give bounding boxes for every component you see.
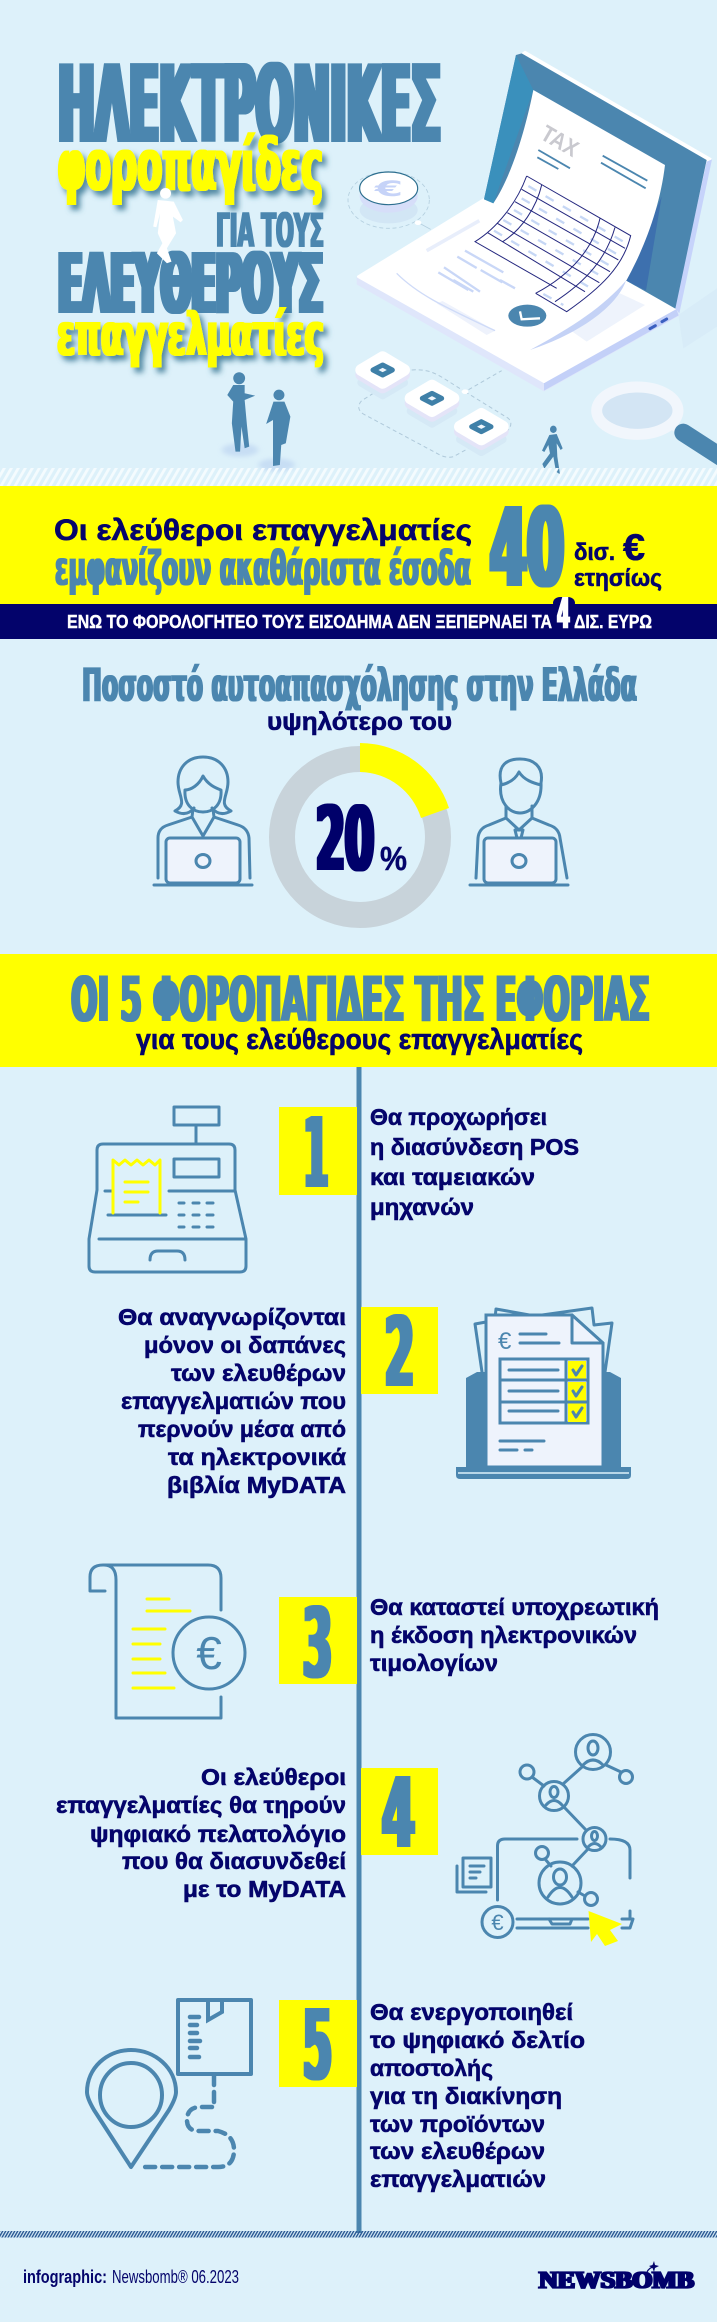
number box 3 [279, 1597, 357, 1684]
text 5: για τη διακίνηση [370, 2083, 562, 2109]
item 2: 2 [385, 1296, 414, 1409]
item 3: 3 [303, 1587, 332, 1700]
timeline vertical line [356, 1067, 362, 2233]
panel: yellow income band: 40 [490, 484, 564, 612]
footer credit: infographic: [23, 2267, 107, 2287]
unit: yearly: ετησίως [574, 565, 662, 592]
text 4: Οι ελεύθεροι [201, 1764, 346, 1790]
icon: customer network on laptop [457, 1734, 633, 1946]
icon: documents on laptop with checklist [456, 1308, 631, 1479]
icon: invoice with euro coin: € [196, 1627, 222, 1679]
panel: navy taxable income band: 4 [557, 589, 570, 639]
text 2 [118, 1304, 346, 1498]
subheading: υψηλότερο του [267, 708, 452, 736]
euro sign: € [623, 527, 645, 568]
text 4: επαγγελματίες θα τηρούν [56, 1792, 346, 1818]
text 2: επαγγελματιών που [121, 1388, 346, 1414]
icon: woman at laptop [154, 757, 252, 885]
icon: location pin with dashed route to parcel [87, 2000, 251, 2167]
number box 1 [279, 1107, 357, 1195]
text 1 [370, 1104, 579, 1220]
item 1 [279, 1097, 579, 1220]
text 5: Θα ενεργοποιηθεί [370, 1999, 573, 2025]
footer logo: Newsbomb: NEWSBOMB [539, 2268, 694, 2294]
text 1: μηχανών [370, 1194, 474, 1220]
hero figures: blue silhouettes [222, 372, 295, 472]
text 5: το ψηφιακό δελτίο [370, 2027, 585, 2053]
text 1: και ταμειακών [370, 1164, 535, 1190]
icon: documents on laptop with checklist: € [498, 1328, 512, 1355]
text 2: Θα αναγνωρίζονται [118, 1304, 346, 1330]
icon: customer network on laptop: € [491, 1910, 504, 1935]
percent sign: % [380, 840, 407, 877]
text 4 [56, 1764, 346, 1902]
text 1: η διασύνδεση POS [370, 1134, 579, 1160]
decorative hatch [0, 468, 717, 486]
decorative hatch [0, 2231, 717, 2238]
unit: billion euro: δισ. [574, 539, 615, 566]
text 5 [370, 1999, 585, 2192]
hero illustration: laptop with tax document [348, 51, 717, 391]
item 4 [56, 1757, 438, 1902]
icon: invoice with euro coin [90, 1565, 245, 1718]
hero icons: three rounded buttons [359, 357, 511, 457]
hero figure: white silhouette over the title [153, 188, 183, 263]
item 5: 5 [303, 1989, 332, 2102]
text 5: των προϊόντων [370, 2111, 545, 2137]
hero figure: walking person [542, 426, 563, 474]
item 1: 1 [304, 1097, 328, 1210]
text 3: Θα καταστεί υποχρεωτική [370, 1594, 659, 1620]
panel: yellow traps heading band [0, 954, 717, 1067]
item 5 [279, 1989, 585, 2192]
text 4: ψηφιακό πελατολόγιο [90, 1821, 346, 1847]
text 1: Θα προχωρήσει [370, 1104, 547, 1130]
income text line 1: Οι ελεύθεροι επαγγελματίες [54, 514, 472, 547]
taxable income text: ΕΝΩ ΤΟ ΦΟΡΟΛΟΓΗΤΕΟ ΤΟΥΣ ΕΙΣΟΔΗΜΑ ΔΕΝ ΞΕΠΕΡΝΑΕΙ ΤΑ [67, 612, 552, 632]
item 2 [118, 1296, 438, 1498]
text 4: με το MyDATA [183, 1876, 346, 1902]
text 2: τα ηλεκτρονικά [168, 1444, 346, 1470]
hero icon: coin symbol: € [374, 176, 403, 201]
hero text: TAX: TAX [536, 120, 584, 162]
number box 5 [279, 2000, 357, 2087]
title: line 5 yellow: επαγγελματίες [57, 300, 324, 370]
text 5: επαγγελματιών [370, 2166, 546, 2192]
item 3 [279, 1587, 659, 1700]
text 5: αποστολής [370, 2055, 493, 2081]
hero icon: magnifying glass [597, 387, 717, 465]
panel: yellow income band [0, 484, 717, 612]
text 2: βιβλία MyDATA [167, 1472, 346, 1498]
text 4: που θα διασυνδεθεί [122, 1848, 346, 1874]
donut chart 20%: 20 [316, 787, 374, 891]
text 3 [370, 1594, 659, 1676]
text: ΓΙΑ ΤΟΥΣ [216, 204, 324, 259]
icon: cash register [89, 1107, 246, 1272]
panel: navy taxable income band [0, 589, 717, 639]
icon: man at laptop [470, 759, 568, 885]
text 5: των ελευθέρων [370, 2138, 545, 2164]
footer credit: Newsbomb® 06.2023 [112, 2267, 239, 2287]
traps subheading: για τους ελεύθερους επαγγελματίες [136, 1024, 583, 1056]
number box 4 [361, 1768, 438, 1855]
yellow 20% segment [360, 743, 449, 818]
text: ΕΛΕΥΘΕΡΟΥΣ [58, 235, 323, 333]
text 3: η έκδοση ηλεκτρονικών [370, 1622, 637, 1648]
text 2: των ελευθέρων [171, 1360, 346, 1386]
donut chart 20% [282, 743, 449, 915]
title: line 2 yellow: φοροπαγίδες [57, 123, 323, 207]
text 2: περνούν μέσα από [138, 1416, 346, 1442]
item 4: 4 [382, 1757, 415, 1870]
number box 2 [361, 1307, 438, 1394]
text 3: τιμολογίων [370, 1650, 498, 1676]
unit text: ΔΙΣ. ΕΥΡΩ [574, 612, 652, 632]
number 4 backing [553, 597, 575, 609]
text 2: μόνον οι δαπάνες [144, 1332, 346, 1358]
